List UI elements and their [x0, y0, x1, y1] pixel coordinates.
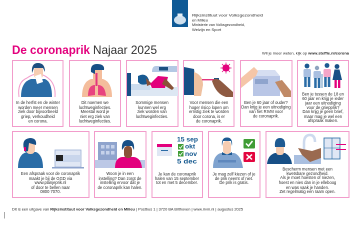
footer: Dit is een uitgave van Rijksinstituut voor Volksgezondheid en Milieu | Postbus 1 | 3720 BA Bilthoven | www.rivm.nl | augustus 2025	[12, 206, 244, 212]
text: Bescherm mensen met een	[282, 166, 333, 172]
icon: man with check and cross	[213, 138, 255, 168]
organisation name: en Milieu	[192, 17, 208, 22]
text: halen van 15 september	[155, 176, 200, 181]
title	[12, 43, 157, 57]
organisation name: Welzijn en Sport	[192, 27, 222, 32]
text: en was vaak je handen.	[286, 185, 329, 190]
text: en corona.	[28, 118, 48, 124]
text: tot en met 5 december.	[156, 180, 198, 185]
title: De coronaprik	[12, 43, 90, 57]
icon: person in bed	[127, 66, 178, 96]
text: kunnen wel erg	[138, 105, 167, 110]
icon: injection in arm	[184, 62, 233, 97]
text: of door te bellen naar	[31, 185, 70, 190]
text: Als je moet hoesten of niezen,	[280, 175, 335, 180]
panel: invitation 60+	[240, 60, 292, 126]
organisation name: Ministerie van Volksgezondheid,	[192, 22, 245, 27]
text: 0800 7070.	[40, 189, 61, 194]
text: Je mag zelf kiezen of je	[213, 172, 256, 176]
text: door corona, is er	[193, 114, 226, 119]
text: de prik neemt of niet.	[215, 176, 253, 181]
text: luchtweginfecties.	[136, 114, 168, 119]
panel: living in an institution	[94, 132, 146, 198]
text: luchtweginfecties.	[79, 105, 111, 110]
text: de coronaprik.	[196, 118, 222, 124]
text: van het RIVM voor	[249, 109, 284, 114]
text: Meestal word je	[81, 109, 110, 114]
title: Najaar 2025	[93, 43, 157, 57]
icon: building and person	[95, 140, 145, 168]
text: Woon je in een	[106, 171, 134, 176]
text: www.planjeprik.nl	[35, 180, 66, 185]
dates list	[177, 136, 198, 165]
text	[136, 100, 169, 119]
dates list: 5 dec	[177, 158, 197, 165]
text: ernstig ziek te worden	[189, 109, 230, 114]
text: worden meer mensen	[18, 105, 59, 110]
text	[279, 166, 337, 194]
text: De prik is gratis.	[219, 180, 249, 185]
text	[16, 100, 61, 124]
text: Dan krijg je geen brief,	[303, 109, 343, 114]
text: afspraak maken.	[308, 118, 338, 123]
text	[302, 92, 345, 123]
text	[241, 100, 291, 119]
panel: free choice	[208, 132, 260, 198]
text	[189, 100, 230, 124]
text: ziek worden van	[137, 109, 168, 114]
text: instelling ervoor dat je	[100, 180, 141, 185]
panel: vaccination	[184, 60, 234, 126]
panel: make an appointment	[12, 132, 89, 198]
panel: respiratory infections	[70, 60, 120, 126]
text: luchtweginfecties.	[79, 118, 111, 124]
text: de coronaprik kan halen.	[98, 185, 142, 190]
icon: sneezing person	[19, 63, 55, 97]
icon: calendar	[157, 144, 172, 156]
dates list: nov	[185, 151, 197, 158]
logo: Rijksoverheid ribbon	[172, 0, 188, 27]
panel: invitation 18-60	[298, 60, 348, 126]
panel: protect vulnerable people	[266, 132, 349, 198]
text: Je kan de coronaprik	[158, 172, 197, 176]
dates list: 15 sep	[177, 136, 198, 144]
text: ziek door bijvoorbeeld	[18, 109, 59, 114]
text: jaar een uitnodiging	[304, 100, 342, 106]
dates list: okt	[185, 144, 196, 150]
text: hoest en nies dan in je elleboog	[279, 180, 337, 185]
panel: seasonal illness	[12, 60, 63, 126]
text: niet erg ziek van	[80, 114, 111, 119]
icon: person on phone with laptop	[18, 138, 84, 168]
text: griep, verkoudheid	[21, 114, 56, 119]
text: Sommige mensen	[136, 100, 169, 105]
organisation name: Rijksinstituut voor Volksgezondheid	[192, 12, 263, 18]
text: de coronaprik.	[253, 114, 279, 119]
text: Een afspraak voor de coronaprik	[21, 171, 81, 176]
icon: hands with envelope	[241, 67, 291, 97]
text	[155, 172, 200, 185]
text: Zet regelmatig een raam open.	[280, 189, 335, 194]
text: maar mag je wel een	[304, 114, 343, 119]
text: voor de griepprik?	[307, 105, 340, 110]
text	[79, 100, 111, 124]
vertical reference mark	[4, 212, 5, 218]
text: Ben je 60 jaar of ouder?	[244, 100, 289, 105]
icon: lungs	[82, 64, 112, 97]
text: hoger risico lopen om	[189, 105, 229, 110]
organisation name	[192, 12, 263, 32]
panel: dates	[152, 132, 202, 198]
text: Voor mensen die een	[190, 100, 229, 105]
text	[21, 171, 81, 194]
text: 60 jaar en krijg je ieder	[302, 96, 344, 101]
text: maakt je bij de GGD via	[29, 176, 73, 181]
panel: seriously ill	[126, 60, 178, 126]
text: Ben je tussen de 18 en	[302, 92, 345, 96]
text: instelling? Dan zorgt de	[99, 176, 142, 181]
text	[213, 172, 256, 185]
text: Dan krijg je een uitnodiging	[241, 104, 291, 109]
icon: four people	[304, 63, 342, 88]
text	[98, 171, 142, 190]
text: In de herfst en de winter	[16, 100, 61, 105]
more info link: Wil je meer weten, kijk op www.steffie.nl/corona	[262, 52, 350, 56]
text: Dit noemen we	[81, 100, 109, 105]
icon: person, washing hands, window	[267, 135, 346, 164]
text: kwetsbare gezondheid.	[286, 171, 329, 176]
